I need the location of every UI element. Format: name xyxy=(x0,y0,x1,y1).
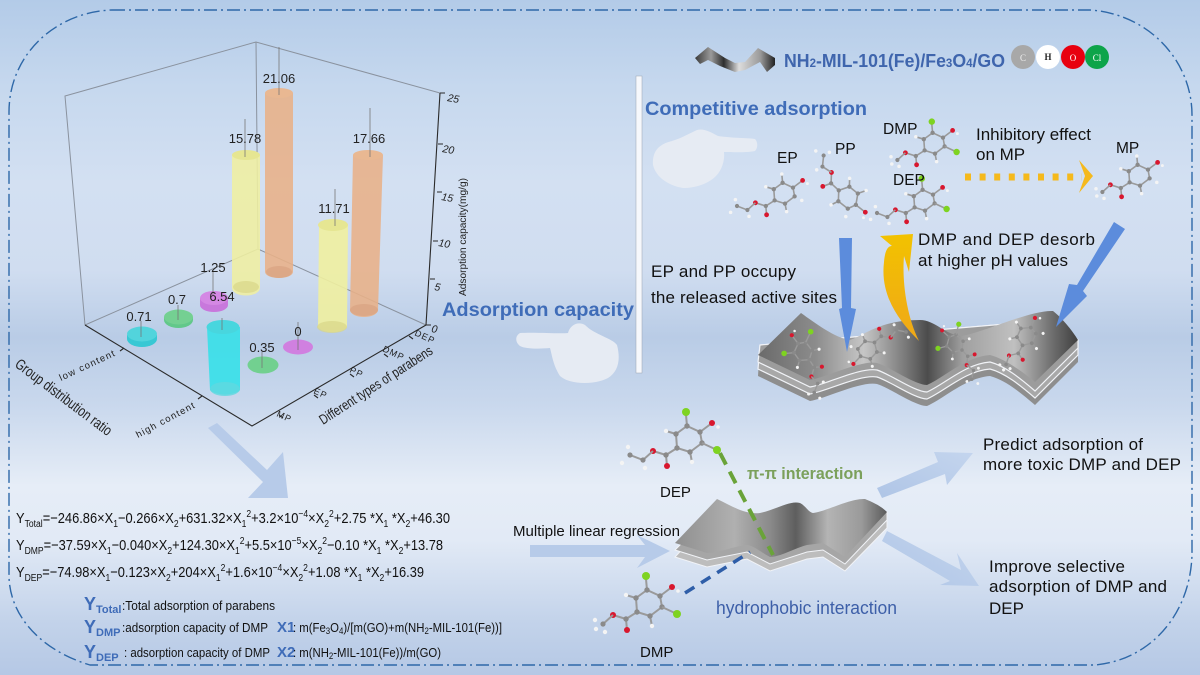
equation: Y DEP: Y xyxy=(16,564,26,581)
equation: Y DMP: 1 xyxy=(377,546,382,557)
text: DMP and DEP desorb: DMP and DEP desorb xyxy=(918,230,1095,249)
interaction line: blue dashed xyxy=(685,552,750,593)
paraben category labels xyxy=(275,328,437,424)
equation: Y DEP: ×X xyxy=(282,564,298,581)
text: improve selective adsorption: adsorption of DMP and xyxy=(989,577,1167,596)
paraben category labels: DMP xyxy=(381,344,406,363)
panel: 3D bar chart of adsorption capacity xyxy=(12,42,469,441)
equation: Y DMP: 2 xyxy=(240,536,245,547)
title: NH2-MIL-101(Fe)/Fe3O4/GO xyxy=(784,50,1005,71)
icon: pointing hand left xyxy=(516,323,619,383)
legend: variable definitions: : m(Fe xyxy=(293,620,331,635)
equation: Y total: +46.30 xyxy=(410,510,450,527)
equation: Y DMP: −0.10 *X xyxy=(327,537,377,554)
arrow: blue down xyxy=(839,238,856,352)
label: DEP: DEP xyxy=(893,172,925,189)
paraben category labels: DEP xyxy=(413,328,437,346)
legend: variable definitions: : adsorption capacity of DMP xyxy=(124,645,270,660)
legend: atom colours: O xyxy=(1070,53,1077,63)
equation: Y total: Y xyxy=(16,510,26,527)
bar: DMP high content 11.71: 11.71 xyxy=(318,201,350,216)
label: pi-pi interaction: π-π interaction xyxy=(747,464,863,483)
z axis title: Adsorption capacity(mg/g) xyxy=(457,178,469,296)
label: DEP lower: DEP xyxy=(660,484,691,501)
legend: variable definitions: X2 xyxy=(277,644,295,661)
paraben category labels: MP xyxy=(275,409,293,424)
legend: variable definitions: -MIL-101(Fe))/m(GO) xyxy=(333,645,441,660)
bar: DEP high content 17.66: 17.66 xyxy=(353,131,385,146)
equation: Y DEP: +16.39 xyxy=(384,564,424,581)
arrow: chart to equations xyxy=(208,423,288,498)
equation: Y DEP: 2 xyxy=(221,563,226,574)
molecule: DEP lower xyxy=(620,408,721,470)
legend: variable definitions: X1 xyxy=(277,619,295,636)
equation: Y total: 1 xyxy=(242,519,247,530)
legend: variable definitions: 2 xyxy=(424,626,429,636)
equation: Y DEP: =−74.98×X xyxy=(42,564,105,581)
arrow: blue diagonal xyxy=(1056,222,1125,327)
equation: Y DEP: 1 xyxy=(358,573,363,584)
equation: Y total: =−246.86×X xyxy=(43,510,113,527)
equation: Y DEP: 2 xyxy=(166,573,171,584)
equation: Y DMP: 2 xyxy=(318,546,323,557)
equation: Y total: +2.75 *X xyxy=(334,510,384,527)
equation: Y total: Total xyxy=(25,519,43,530)
equation: Y DMP: DMP xyxy=(25,546,44,557)
legend: variable definitions: Y xyxy=(84,617,96,637)
bar: EP low content 1.25: 1.25 xyxy=(200,260,226,275)
equation: Y total: 2 xyxy=(246,509,252,520)
legend: variable definitions: : m(NH xyxy=(293,645,334,660)
bar: MP high content 6.54: 6.54 xyxy=(209,289,235,304)
equation: Y DMP: −0.040×X xyxy=(112,537,167,554)
label: hydrophobic interaction: hydrophobic interaction xyxy=(716,598,897,618)
equation: Y DEP: −4 xyxy=(273,563,283,574)
interaction line: green dashed xyxy=(720,453,773,555)
graphic: small adsorbent sheet xyxy=(675,499,887,571)
legend: variable definitions: O xyxy=(330,620,339,635)
equation: Y total: 2 xyxy=(174,519,179,530)
text: improve selective adsorption: Improve selective xyxy=(989,557,1125,576)
equation: Y DEP: 1 xyxy=(105,573,111,584)
equation: Y DMP: 1 xyxy=(107,546,112,557)
label: DMP lower: DMP xyxy=(640,644,673,661)
z axis tick labels: 25 xyxy=(445,92,460,106)
equation: Y DEP: 1 xyxy=(216,573,221,584)
equation: Y DEP: −0.123×X xyxy=(110,564,166,581)
paraben category labels: PP xyxy=(348,365,365,380)
bar: MP high content 6.54 xyxy=(206,289,240,396)
arrow: regression to sheet xyxy=(530,535,670,568)
equation: Y DMP: ×X xyxy=(301,537,318,554)
label: EP: EP xyxy=(777,150,798,167)
equation: Y DMP: 2 xyxy=(322,536,327,547)
text: DMP and DEP desorb: at higher pH values xyxy=(918,251,1068,270)
bar: PP high content 0.35 xyxy=(248,340,278,374)
bar: DMP high content 11.71 xyxy=(317,189,350,333)
group tick labels: low content xyxy=(58,348,118,384)
text: EP and PP occupy: EP and PP occupy xyxy=(651,262,796,281)
arrow: yellow curved up xyxy=(880,234,919,341)
text: inhibitory effect: on MP xyxy=(976,145,1025,164)
equation: Y DEP: 2 xyxy=(298,573,304,584)
heading: Competitive adsorption: Competitive adsorption xyxy=(645,99,867,120)
z axis tick labels: 20 xyxy=(440,143,455,157)
equation: Y DMP: −5 xyxy=(292,536,302,547)
text: improve selective adsorption xyxy=(989,557,1167,618)
bar: PP low content 0.7: 0.7 xyxy=(168,292,186,307)
text: EP and PP occupy xyxy=(651,262,837,307)
text: improve selective adsorption: DEP xyxy=(989,599,1024,618)
equation: Y DEP: 2 xyxy=(380,573,385,584)
text: DMP and DEP desorb xyxy=(918,230,1095,270)
label: PP: PP xyxy=(835,141,856,158)
bar: EP high content 0: 0 xyxy=(294,324,302,339)
equations xyxy=(16,509,450,584)
legend: variable definitions: -MIL-101(Fe))] xyxy=(429,620,502,635)
equation: Y DMP: +13.78 xyxy=(403,537,443,554)
legend: variable definitions: Y xyxy=(84,594,96,614)
legend: variable definitions: :adsorption capacity of DMP xyxy=(122,620,268,635)
equation: Y total: −0.266×X xyxy=(118,510,174,527)
arrow: dotted yellow xyxy=(965,160,1093,193)
molecule: EP xyxy=(729,172,809,218)
equation: Y total: *X xyxy=(388,510,406,527)
legend: variable definitions xyxy=(84,594,502,664)
bar: PP low content 0.7 xyxy=(164,292,193,328)
equation: Y total: 1 xyxy=(113,519,118,530)
equation: Y DEP: +204×X xyxy=(171,564,216,581)
heading: Adsorption capacity: Adsorption capacity xyxy=(442,300,634,321)
bar: EP low content 1.25 xyxy=(200,260,228,312)
equation: Y total: +631.32×X xyxy=(179,510,242,527)
equation: Y DMP: 1 xyxy=(235,546,240,557)
legend: variable definitions: DEP xyxy=(96,652,119,664)
bar: DMP low content 15.78: 15.78 xyxy=(229,131,261,146)
molecule: DEP xyxy=(869,175,950,225)
equation: Y DMP: +124.30×X xyxy=(172,537,235,554)
legend: atom colours xyxy=(1011,45,1109,69)
equation: Y total: +3.2×10 xyxy=(251,510,298,527)
legend: variable definitions: Y xyxy=(84,642,96,662)
icon: wavy sheet in title xyxy=(695,47,775,72)
equation: Y DMP: 2 xyxy=(399,546,404,557)
z axis tick labels: 0 xyxy=(430,323,438,336)
bar: EP high content 0 xyxy=(283,322,313,354)
equation: Y DEP: 2 xyxy=(303,563,308,574)
text: EP and PP occupy: the released active sites xyxy=(651,288,837,307)
arrow: to selective adsorption xyxy=(882,531,979,586)
legend: atom colours: C xyxy=(1020,53,1026,63)
equation: Y total: ×X xyxy=(308,510,324,527)
legend: variable definitions: 3 xyxy=(326,626,330,636)
molecule: DMP lower xyxy=(593,572,681,634)
chart frame xyxy=(65,42,440,325)
equation: Y DMP: Y xyxy=(16,537,26,554)
equation: Y DEP: DEP xyxy=(25,573,42,584)
equation: Y total: 2 xyxy=(329,509,334,520)
legend: atom colours: H xyxy=(1044,52,1052,62)
bar: DEP high content 17.66 xyxy=(350,108,385,317)
legend: atom colours: Cl xyxy=(1093,53,1102,63)
label: MP: MP xyxy=(1116,140,1139,157)
bar: DEP low content 21.06 xyxy=(263,47,295,278)
legend: variable definitions: :Total adsorption of parabens xyxy=(122,598,275,613)
equation: Y DMP: =−37.59×X xyxy=(44,537,107,554)
z axis tick labels: 10 xyxy=(437,237,451,251)
paraben category labels: EP xyxy=(312,386,329,401)
equation: Y total: −4 xyxy=(298,509,309,520)
bar: PP high content 0.35: 0.35 xyxy=(249,340,275,355)
label: multiple linear regression: Multiple linear regression xyxy=(513,523,680,540)
bar: DMP low content 15.78 xyxy=(229,119,261,296)
equation: Y total: 2 xyxy=(406,519,411,530)
group axis title: Group distribution ratio xyxy=(12,356,115,440)
molecule: MP xyxy=(1094,154,1164,200)
legend: variable definitions: DMP xyxy=(96,627,120,639)
equation: Y DEP: +1.08 *X xyxy=(308,564,358,581)
equation: Y DEP: *X xyxy=(362,564,380,581)
text: predict adsorption xyxy=(983,435,1181,474)
legend: variable definitions: 4 xyxy=(339,626,343,636)
arrow: to predict adsorption xyxy=(877,452,973,498)
molecule: PP xyxy=(810,139,875,228)
z axis tick labels: 5 xyxy=(433,281,441,294)
equation: Y DMP: 2 xyxy=(167,546,172,557)
z axis tick labels: 15 xyxy=(440,191,454,205)
icon: pointing hand right xyxy=(653,130,757,188)
divider xyxy=(636,76,642,373)
bar: MP low content 0.71: 0.71 xyxy=(126,309,152,324)
z axis tick labels xyxy=(430,92,460,336)
panel: 3D bar chart of adsorption capacity: high content xyxy=(134,400,198,441)
legend: variable definitions: Total xyxy=(96,604,121,616)
chart axes xyxy=(85,93,445,426)
equation: Y total: 2 xyxy=(324,519,329,530)
label: DMP: DMP xyxy=(883,121,917,138)
text: predict adsorption: more toxic DMP and DEP xyxy=(983,455,1181,474)
molecule: DMP xyxy=(889,118,960,168)
equation: Y DEP: +1.6×10 xyxy=(225,564,273,581)
equation: Y DMP: +5.5×10 xyxy=(245,537,292,554)
legend: variable definitions: )/[m(GO)+m(NH xyxy=(343,620,424,635)
graphic: layered adsorbent sheet xyxy=(758,311,1078,406)
paraben axis title: Different types of parabens xyxy=(316,342,435,428)
text: inhibitory effect: Inhibitory effect xyxy=(976,125,1091,144)
equation: Y total: 1 xyxy=(384,519,389,530)
equation: Y DMP: *X xyxy=(381,537,399,554)
molecules on sheet xyxy=(781,309,1056,400)
bar: MP low content 0.71 xyxy=(126,309,157,347)
text: predict adsorption: Predict adsorption of xyxy=(983,435,1143,454)
legend: variable definitions: 2 xyxy=(329,651,333,661)
bar: DEP low content 21.06: 21.06 xyxy=(263,71,295,86)
